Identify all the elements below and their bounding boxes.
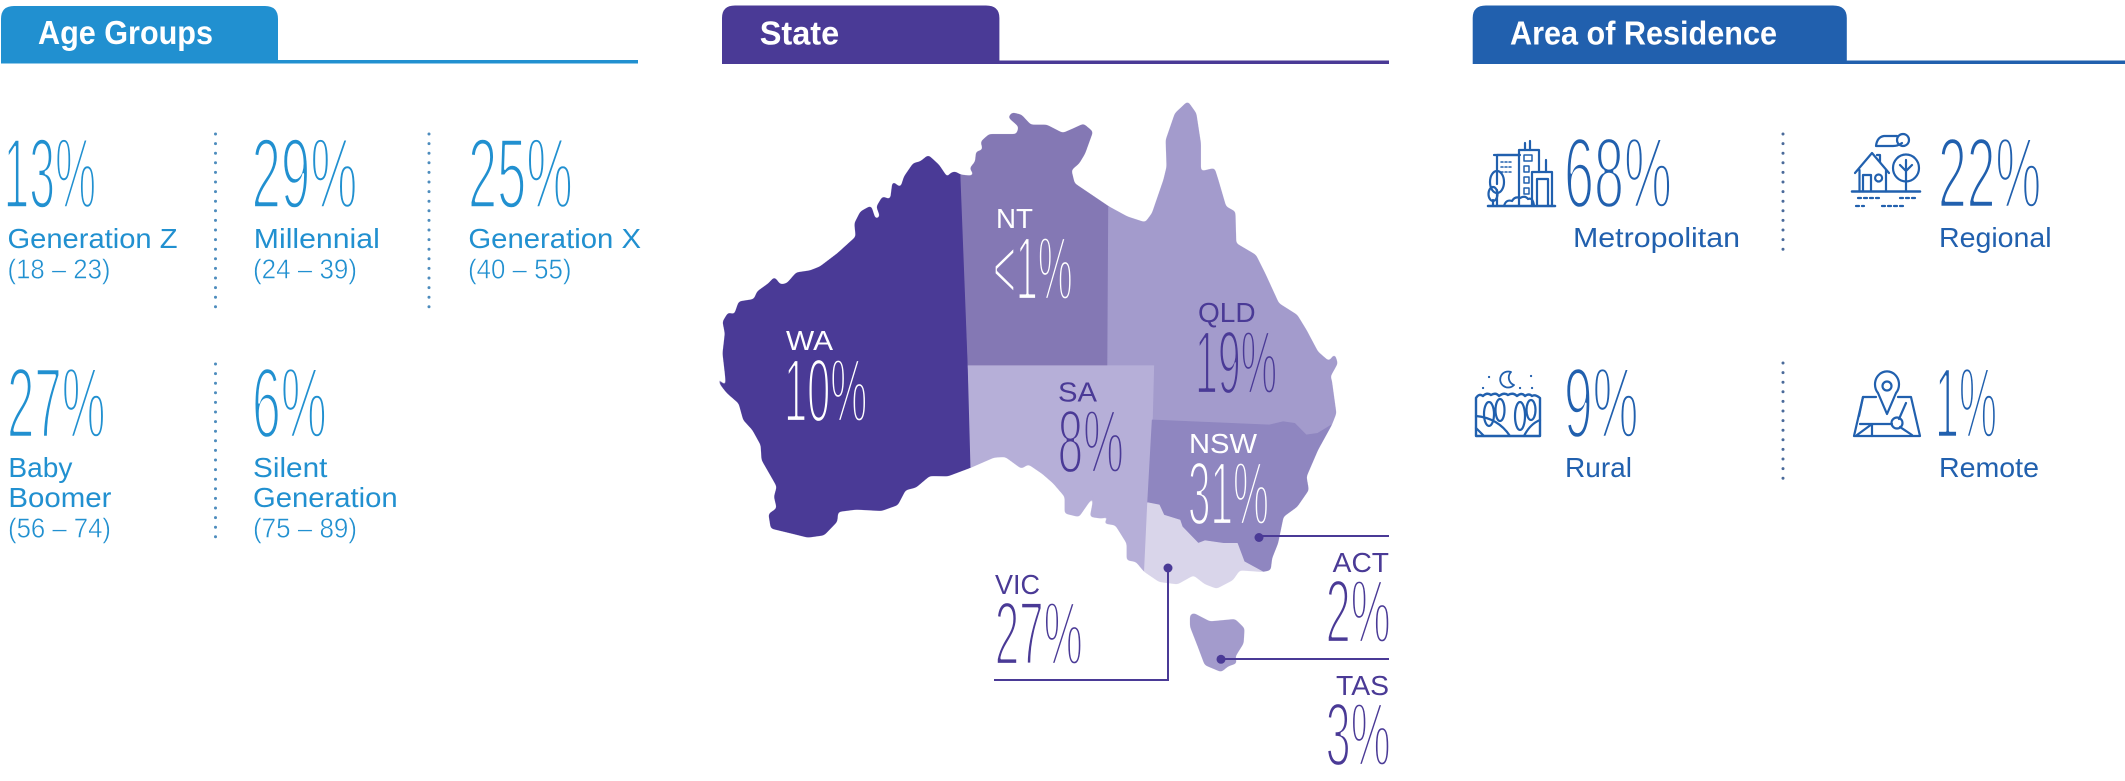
stat: baby boomer: 27% xyxy=(7,347,105,459)
callout: vic: VIC xyxy=(995,569,1040,600)
callout: vic: 27% xyxy=(995,585,1083,685)
heading: age groups: Age Groups xyxy=(38,14,213,51)
stat: generation x xyxy=(468,118,641,285)
label: qld: 19% xyxy=(1195,313,1277,413)
stat: baby boomer: Boomer xyxy=(8,482,111,513)
region: northern territory xyxy=(961,113,1109,366)
label: nsw: 31% xyxy=(1188,443,1269,544)
heading: area of residence: Area of Residence xyxy=(1510,14,1777,52)
stat: remote: 1% xyxy=(1935,348,1997,460)
label: sa: SA xyxy=(1058,377,1097,408)
region: western australia xyxy=(717,155,971,537)
stat: generation x: (40 – 55) xyxy=(468,254,572,285)
stat: remote xyxy=(1935,348,2039,483)
stat: millennial xyxy=(252,118,380,285)
heading: area of residence xyxy=(1473,6,2125,64)
heading: state: State xyxy=(760,14,839,52)
panel: age groups xyxy=(1,6,641,544)
stat: silent generation xyxy=(252,347,398,544)
icon: regional house xyxy=(1852,134,1920,206)
stat: millennial: 29% xyxy=(252,118,357,229)
icon: rural night landscape xyxy=(1476,371,1540,436)
panel: area of residence xyxy=(1473,6,2125,483)
heading: state xyxy=(722,6,1389,64)
stat: baby boomer: (56 – 74) xyxy=(8,512,111,544)
stat: generation z: 13% xyxy=(4,117,96,230)
stat: regional: Regional xyxy=(1939,222,2052,253)
panel: state xyxy=(717,6,1391,781)
region: tasmania xyxy=(1190,613,1244,672)
stat: generation z xyxy=(4,117,178,285)
callout: tas xyxy=(1216,655,1391,781)
stat: rural: Rural xyxy=(1565,452,1632,483)
stat: metropolitan: 68% xyxy=(1564,118,1672,230)
stat: millennial: Millennial xyxy=(254,223,380,254)
stat: baby boomer: Baby xyxy=(8,452,72,483)
stat: generation x: Generation X xyxy=(468,223,641,254)
stat: silent generation: Silent xyxy=(253,452,328,483)
heading: age groups xyxy=(1,6,638,64)
stat: silent generation: (75 – 89) xyxy=(253,512,357,544)
stat: metropolitan xyxy=(1564,118,1740,253)
region: queensland xyxy=(1108,102,1337,435)
stat: silent generation: Generation xyxy=(253,482,398,513)
label: nt: NT xyxy=(996,203,1033,234)
map of australia xyxy=(717,102,1337,672)
callout: act xyxy=(1254,533,1391,663)
label: nsw: NSW xyxy=(1189,428,1258,459)
callout: act: 2% xyxy=(1326,563,1391,663)
region: south australia xyxy=(968,366,1154,572)
stat: rural: 9% xyxy=(1564,347,1638,459)
label: qld: QLD xyxy=(1198,297,1256,328)
icon: remote map pin xyxy=(1854,371,1920,436)
callout: tas: TAS xyxy=(1336,670,1389,701)
stat: baby boomer xyxy=(7,347,111,544)
stat: silent generation: 6% xyxy=(252,347,327,459)
stat: generation z: Generation Z xyxy=(8,223,178,254)
stat: millennial: (24 – 39) xyxy=(253,254,357,285)
label: nt: <1% xyxy=(993,218,1073,319)
stat: generation x: 25% xyxy=(468,118,573,229)
region: victoria xyxy=(1144,503,1262,588)
stat: metropolitan: Metropolitan xyxy=(1573,222,1740,253)
label: sa: 8% xyxy=(1058,392,1124,492)
callout: vic xyxy=(994,564,1172,685)
icon: city buildings xyxy=(1488,141,1555,206)
callout: act: ACT xyxy=(1333,547,1389,578)
label: wa: WA xyxy=(786,325,833,356)
label: wa: 10% xyxy=(784,341,867,441)
stat: generation z: (18 – 23) xyxy=(8,254,110,285)
stat: regional: 22% xyxy=(1938,117,2041,229)
stat: remote: Remote xyxy=(1939,452,2039,483)
region: new south wales xyxy=(1148,420,1331,572)
